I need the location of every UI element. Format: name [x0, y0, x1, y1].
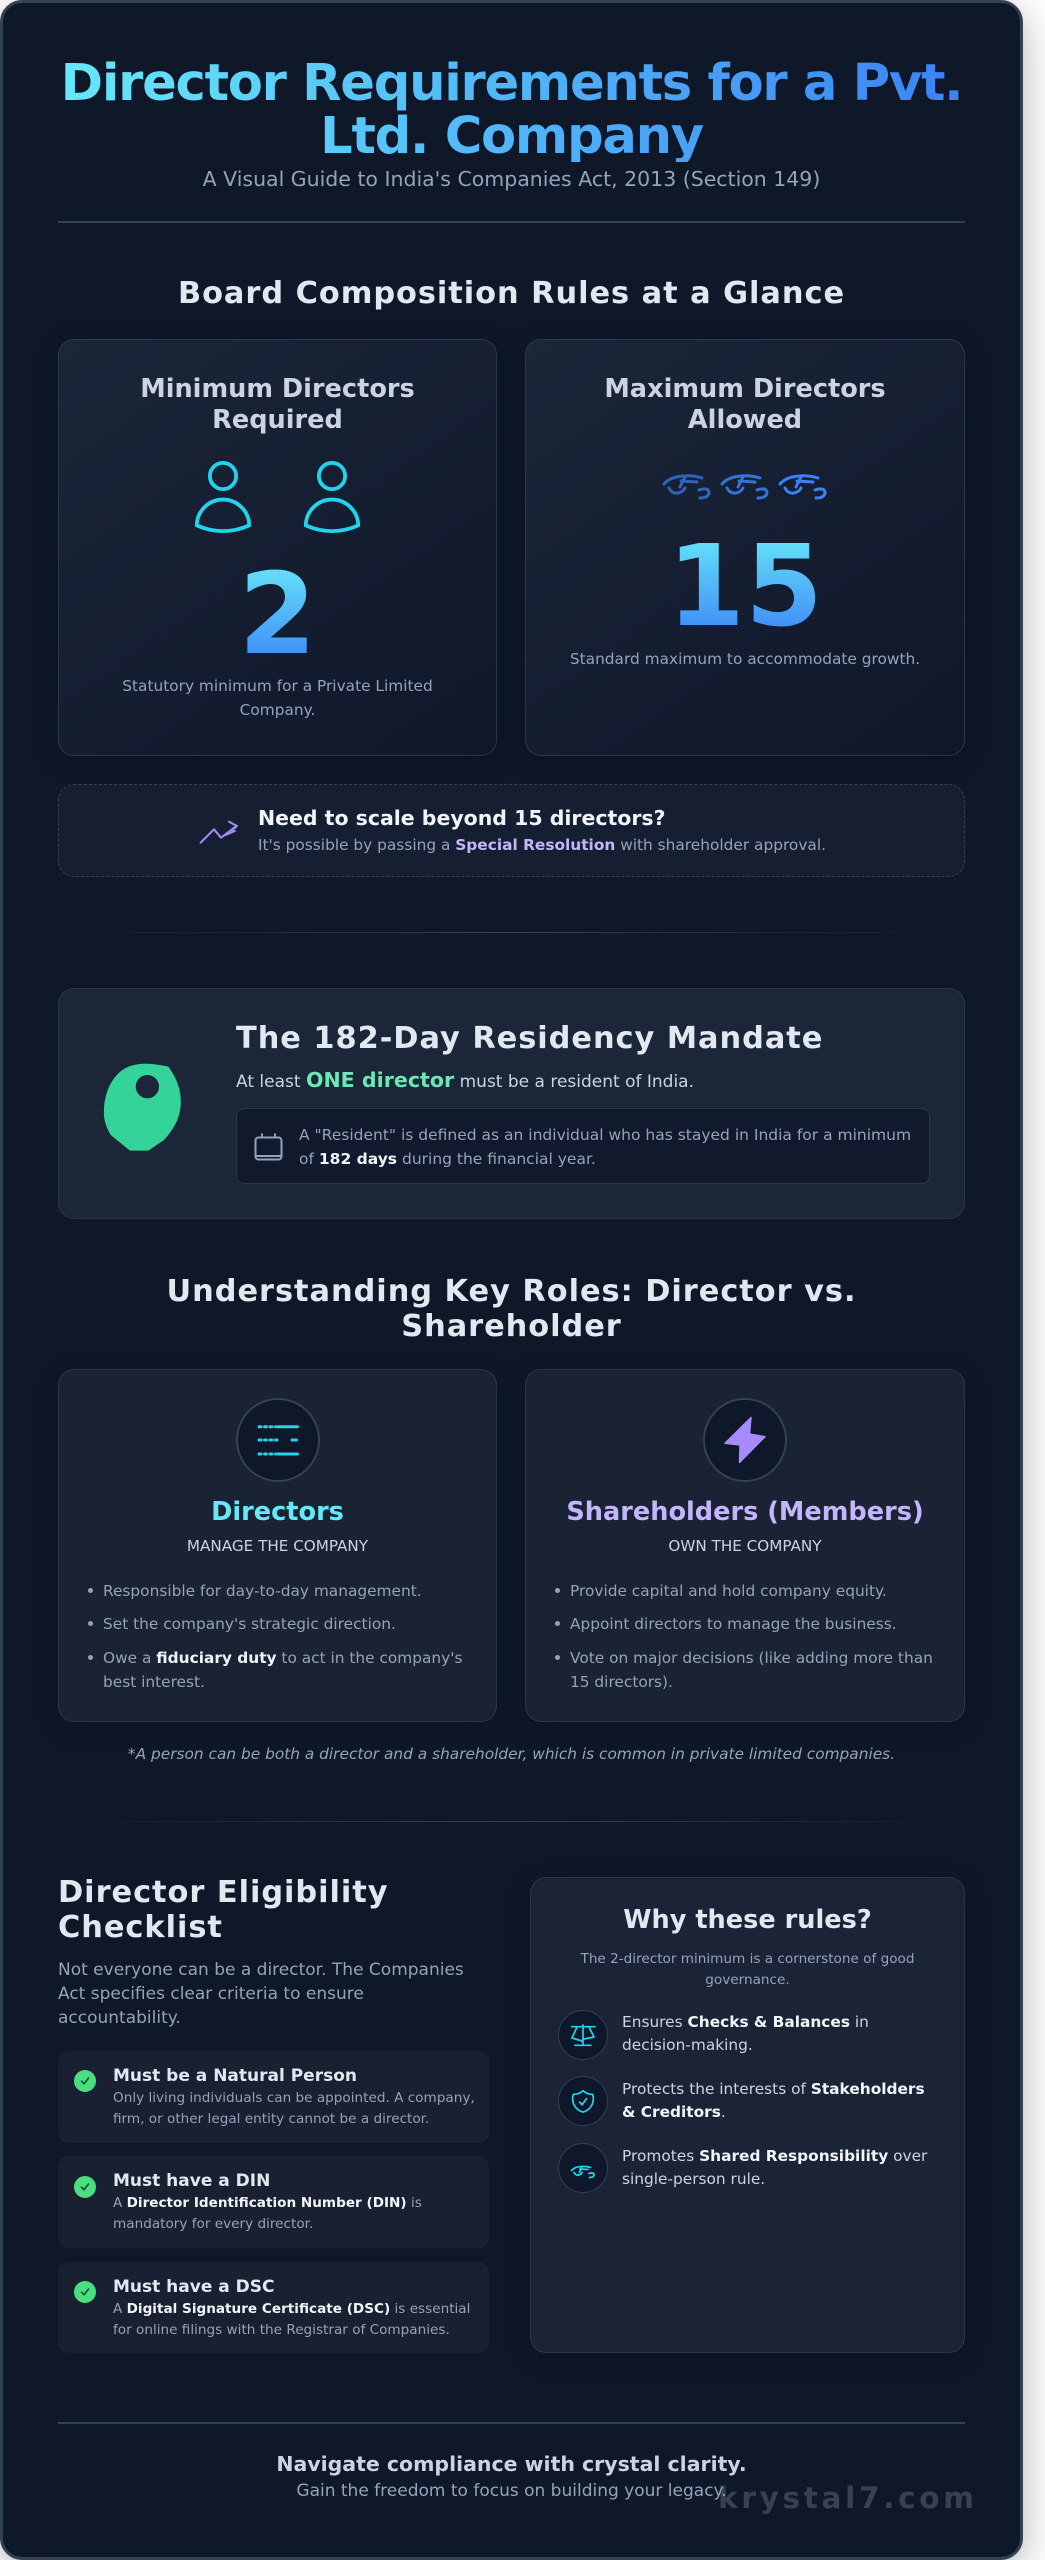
panel: why these rules	[530, 1877, 965, 2353]
icon: trending arrow	[200, 820, 238, 844]
directors list item 3: Owe a fiduciary duty to act in the company's	[103, 1649, 462, 1667]
shareholders list item 2: Appoint directors to manage the business.	[570, 1615, 897, 1633]
icon: scales	[558, 2010, 608, 2060]
item text: mandatory for every director.	[113, 2216, 313, 2232]
reason text	[622, 2080, 925, 2121]
icon: calendar	[254, 1134, 282, 1160]
directors subtitle: MANAGE THE COMPANY	[187, 1537, 368, 1555]
eligibility intro: accountability.	[58, 2008, 181, 2028]
definition text: of 182 days during the financial year.	[299, 1150, 596, 1168]
reason text	[622, 2013, 869, 2054]
reason text: & Creditors.	[622, 2103, 726, 2121]
description: minimum: Company.	[240, 701, 315, 719]
item title: Must be a Natural Person	[113, 2066, 357, 2086]
residency heading: The 182-Day Residency Mandate	[236, 1021, 823, 1056]
heading: maximum directors: Allowed	[688, 405, 802, 435]
panel: directors	[58, 1369, 497, 1722]
panel: maximum directors	[525, 339, 965, 756]
directors title: Directors	[211, 1497, 344, 1527]
callout text: It's possible by passing a Special Resolution with shareholder approval.	[258, 836, 826, 854]
panel: residency mandate	[58, 988, 965, 1219]
description: minimum	[122, 677, 433, 719]
directors list item 1: Responsible for day-to-day management.	[103, 1582, 422, 1600]
icon: check	[74, 2281, 96, 2303]
icon: check	[74, 2070, 96, 2092]
subtitle: A Visual Guide to India's Companies Act, 2013 (Section 149)	[203, 167, 820, 191]
item title: Must have a DIN	[113, 2171, 270, 2191]
item text	[113, 2301, 470, 2338]
title: Ltd. Company	[320, 106, 703, 166]
definition box	[236, 1108, 930, 1184]
icon: check	[74, 2176, 96, 2198]
eligibility intro	[58, 1960, 464, 2028]
shareholders list item 3: Vote on major decisions (like adding more than	[570, 1649, 933, 1667]
icon: lightning bolt	[703, 1398, 787, 1482]
icon: shield	[558, 2076, 608, 2126]
shareholders list item 3: 15 directors).	[570, 1673, 673, 1691]
why text: governance.	[705, 1972, 790, 1988]
icon: handshake	[558, 2143, 608, 2193]
why heading: Why these rules?	[623, 1905, 872, 1935]
definition text: A "Resident" is defined as an individual who has stayed in India for a minimum	[299, 1126, 911, 1144]
description: maximum: Standard maximum to accommodate growth.	[570, 650, 920, 668]
eligibility intro: Not everyone can be a director. The Companies	[58, 1960, 464, 1980]
title	[58, 57, 965, 162]
heading: board composition: Board Composition Rules at a Glance	[178, 276, 845, 311]
item text: A Digital Signature Certificate (DSC) is essential	[113, 2301, 470, 2317]
heading: minimum directors: Required	[212, 405, 343, 435]
number: 15	[525, 531, 965, 643]
footer text: Gain the freedom to focus on building your legacy.	[296, 2481, 727, 2501]
icon: directors sliders	[236, 1398, 320, 1482]
title: Director Requirements for a Pvt.	[61, 53, 962, 113]
icon: three handshake glyphs	[662, 474, 826, 500]
panel: shareholders	[525, 1369, 965, 1722]
heading: key roles: Shareholder	[401, 1309, 622, 1344]
item text	[113, 2195, 422, 2232]
shareholders subtitle: OWN THE COMPANY	[668, 1537, 822, 1555]
number: 2	[58, 558, 497, 670]
number: 2: 2	[239, 550, 316, 680]
callout heading: Need to scale beyond 15 directors?	[258, 806, 665, 830]
reason: checks and balances	[558, 2010, 869, 2060]
heading: key roles	[167, 1274, 856, 1344]
checklist item: din	[58, 2156, 489, 2248]
item text	[113, 2090, 475, 2126]
description: minimum: Statutory minimum for a Private Limited	[122, 677, 433, 695]
reason: shared responsibility	[558, 2143, 928, 2193]
eligibility intro: Act specifies clear criteria to ensure	[58, 1984, 364, 2004]
icon: location pin	[104, 1064, 181, 1151]
item text: Only living individuals can be appointed. A company,	[113, 2090, 475, 2106]
why text: The 2-director minimum is a cornerstone of good	[581, 1951, 914, 1967]
heading: maximum directors	[604, 374, 886, 435]
directors list item 2: Set the company's strategic direction.	[103, 1615, 396, 1633]
reason text: decision-making.	[622, 2036, 753, 2054]
item text: for online filings with the Registrar of Companies.	[113, 2322, 450, 2338]
definition text	[299, 1126, 911, 1168]
shareholders list item 1: Provide capital and hold company equity.	[570, 1582, 887, 1600]
heading: eligibility checklist	[58, 1875, 389, 1945]
item text: A Director Identification Number (DIN) is	[113, 2195, 422, 2211]
item title: Must have a DSC	[113, 2277, 275, 2297]
reason text: Ensures Checks & Balances in	[622, 2013, 869, 2031]
number: 15: 15	[667, 522, 823, 652]
directors list item 3: best interest.	[103, 1673, 205, 1691]
residency statement: At least ONE director must be a resident of India.	[236, 1068, 694, 1092]
item text: firm, or other legal entity cannot be a director.	[113, 2110, 429, 2126]
watermark: krystal7.com	[718, 2481, 978, 2515]
reason: stakeholders	[558, 2076, 925, 2126]
heading: minimum directors: Minimum Directors	[140, 374, 415, 404]
checklist item: dsc	[58, 2262, 489, 2353]
heading: minimum directors	[140, 374, 415, 435]
reason text: Protects the interests of Stakeholders	[622, 2080, 925, 2098]
shareholders title: Shareholders (Members)	[566, 1497, 924, 1527]
note: director and shareholder: *A person can be both a director and a shareholder, which is common in private limited companies.	[128, 1745, 895, 1763]
checklist item: natural person	[58, 2051, 489, 2143]
reason text: single-person rule.	[622, 2170, 765, 2188]
heading: key roles: Understanding Key Roles: Director vs.	[167, 1274, 856, 1309]
icon: two people	[194, 461, 360, 533]
heading: maximum directors: Maximum Directors	[604, 374, 886, 404]
reason text	[622, 2147, 928, 2188]
footer heading: Navigate compliance with crystal clarity.	[276, 2452, 747, 2476]
callout: scale beyond 15	[58, 784, 965, 877]
directors list item 3	[103, 1646, 462, 1694]
why text	[580, 1951, 914, 1988]
heading: eligibility checklist: Director Eligibility	[58, 1875, 389, 1910]
reason text: Promotes Shared Responsibility over	[622, 2147, 927, 2165]
panel: minimum directors	[58, 339, 497, 756]
heading: eligibility checklist: Checklist	[58, 1910, 223, 1945]
shareholders list item 3	[570, 1646, 933, 1694]
